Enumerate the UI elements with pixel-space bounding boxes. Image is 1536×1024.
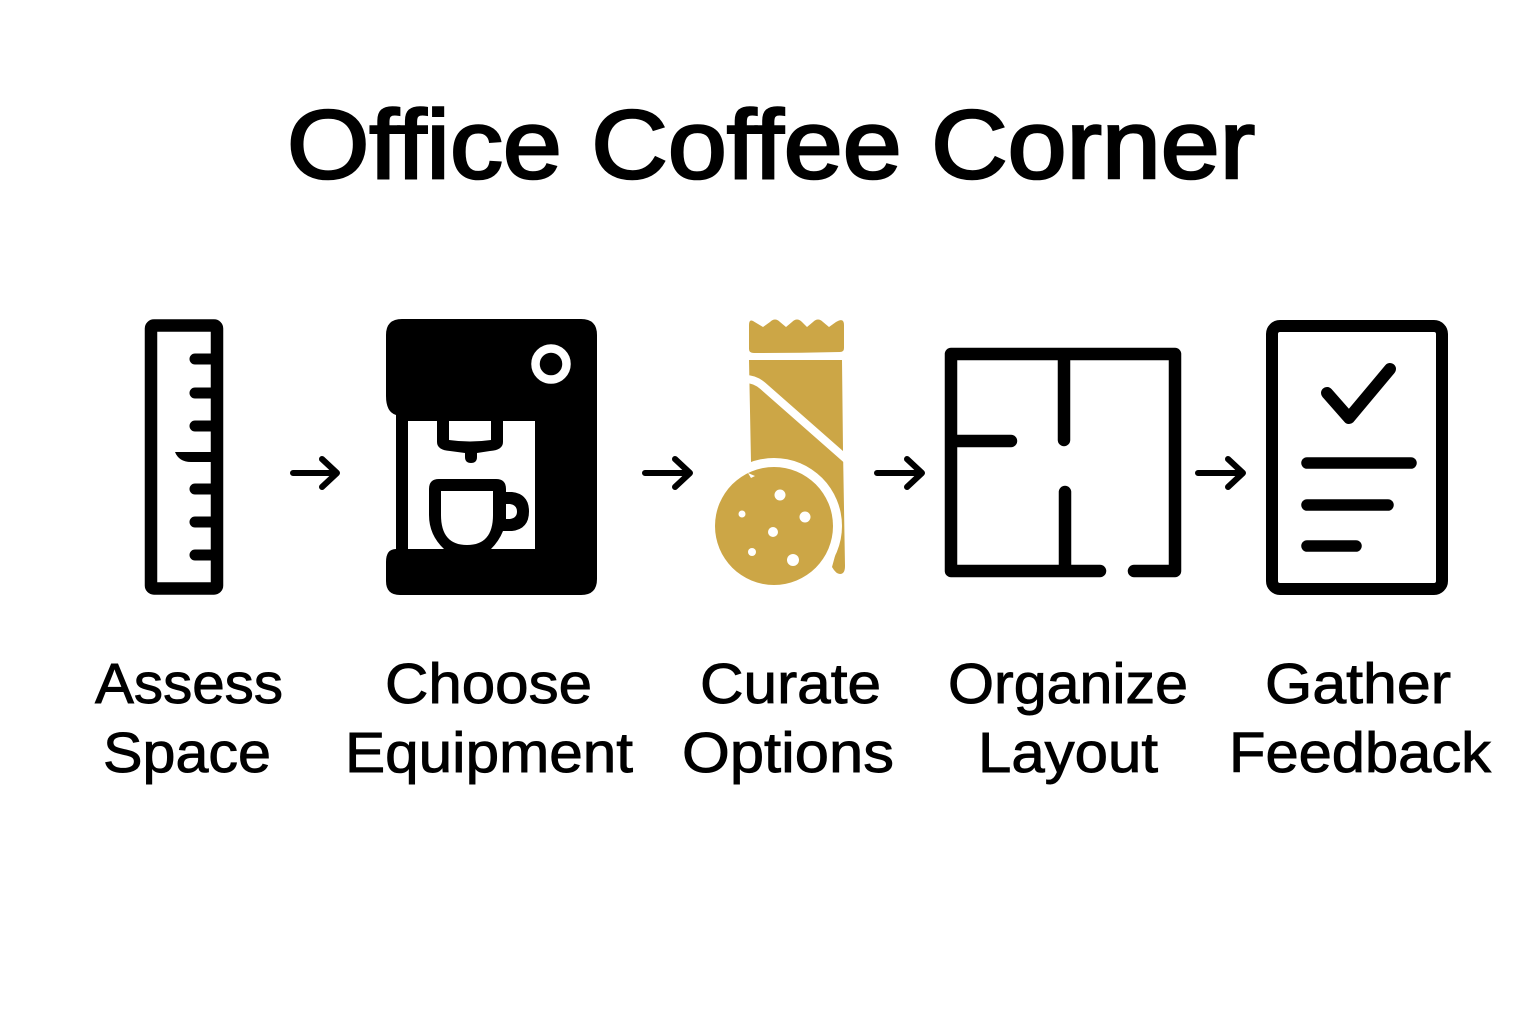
label: Assess Space xyxy=(95,652,283,785)
label: Organize Layout xyxy=(948,652,1188,785)
label: Choose Equipment xyxy=(345,652,633,785)
label: Gather Feedback xyxy=(1229,652,1492,785)
arrow: step 1 to 2 xyxy=(293,459,337,487)
label: Choose Equipment: Equipment xyxy=(345,721,633,785)
icon: snack bar and cookie xyxy=(706,320,846,594)
label: Assess Space: Space xyxy=(103,721,271,785)
label: Gather Feedback: Feedback xyxy=(1229,721,1492,785)
label: Choose Equipment: Choose xyxy=(385,652,592,716)
arrow: step 2 to 3 xyxy=(645,459,690,487)
label: Organize Layout: Layout xyxy=(978,721,1158,785)
label: Curate Options xyxy=(682,652,894,785)
icon: floor plan xyxy=(951,354,1175,571)
icon: coffee machine xyxy=(386,319,597,595)
label: Assess Space: Assess xyxy=(95,652,283,716)
label: Curate Options: Options xyxy=(682,721,894,785)
icon: checklist document xyxy=(1272,326,1442,589)
label: Gather Feedback: Gather xyxy=(1265,652,1451,716)
arrow: step 4 to 5 xyxy=(1198,459,1243,487)
title: Office Coffee Corner xyxy=(287,90,1255,199)
label: Organize Layout: Organize xyxy=(948,652,1188,716)
label: Curate Options: Curate xyxy=(700,652,881,716)
icon: ruler xyxy=(151,326,217,588)
arrow: step 3 to 4 xyxy=(877,459,922,487)
